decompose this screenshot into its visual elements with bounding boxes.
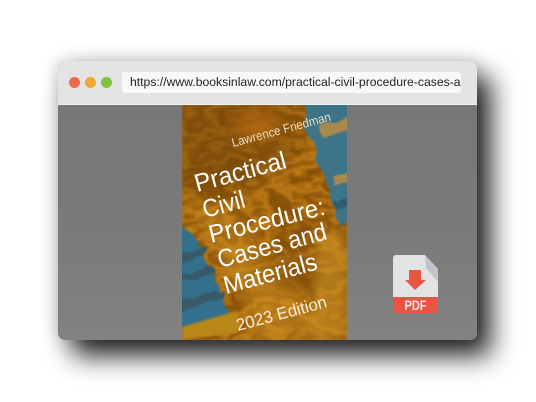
PDF badge: PDF [404, 297, 427, 313]
address bar [122, 72, 461, 93]
title bar [58, 61, 477, 105]
window control: green [101, 77, 112, 88]
book title [191, 146, 330, 300]
book title: Civil [199, 186, 248, 224]
edition: 2023 Edition [234, 292, 329, 335]
blue bands upper right [302, 97, 357, 225]
tonal shading [182, 105, 347, 340]
author name: Lawrence Friedman [230, 110, 332, 150]
book title: Materials [220, 248, 320, 300]
book cover [182, 105, 347, 340]
icon: PDF file download [393, 255, 438, 313]
address bar: https://www.booksinlaw.com/practical-civil-procedure-cases-a [130, 75, 461, 89]
window control: red [69, 77, 80, 88]
book title: Practical [191, 146, 289, 198]
gold band bottom left [182, 311, 242, 340]
browser window [58, 61, 477, 340]
window control: amber [85, 77, 96, 88]
book title: Cases and [214, 218, 330, 274]
book title: Procedure: [206, 193, 328, 249]
blue bands lower left [172, 221, 231, 331]
download arrow [405, 270, 426, 290]
cover artwork [172, 97, 357, 340]
